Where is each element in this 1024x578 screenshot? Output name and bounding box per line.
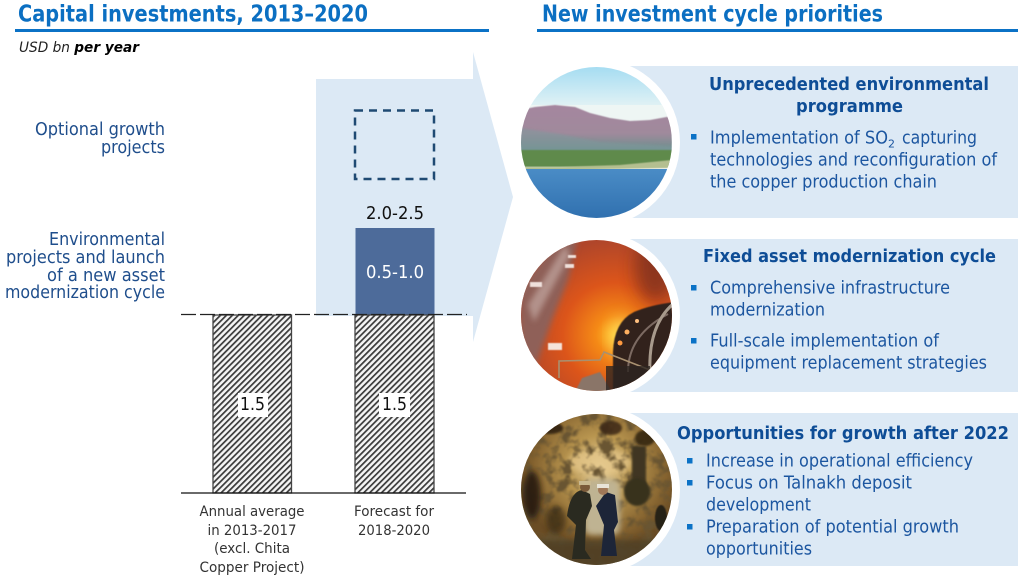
bullet list: Preparation of potential growth [706,518,959,538]
panel: opportunities for growth [513,406,1018,573]
bullet list: equipment replacement strategies [710,354,987,374]
panel: fixed asset modernization [513,232,1018,399]
axis label: annual average: Copper Project) [200,560,304,576]
bar: annual average [213,315,292,493]
dashed box: optional growth [355,110,434,179]
label: environmental projects: projects and launch [6,248,165,268]
photo: lake and mountains [520,66,674,221]
bar: annual average: 1.5 [240,394,265,415]
axis label: annual average: Annual average [200,504,305,520]
bullet list: opportunities [706,540,812,560]
miner left [567,490,592,559]
bullet list: the copper production chain [710,172,937,192]
heading: programme [796,96,903,117]
bullet list: Increase in operational efficiency [706,452,973,472]
label: environmental projects: Environmental [49,230,165,250]
bullet list: Focus on Talnakh deposit [706,474,912,494]
label: optional growth projects [35,120,165,158]
bullet list: development [706,496,811,516]
bullet list: 2 [888,138,895,150]
bullet list [691,128,998,192]
bullet list: Full-scale implementation of [710,332,940,352]
heading [709,74,989,117]
panel: environmental programme [521,66,1018,218]
bullet list: capturing [902,128,977,148]
chart: capital investment bars [181,110,467,576]
label: optional growth projects: Optional growth [35,120,165,140]
axis label: annual average [200,504,305,576]
arrow: background pointing to priorities [316,52,513,342]
photo: underground miners [520,413,674,568]
title: capital investments: Capital investments, 2013–2020 [18,2,368,28]
axis label: forecast: 2018-2020 [358,523,430,539]
heading: Fixed asset modernization cycle [703,246,996,267]
bullet list: modernization [710,300,825,320]
photo: molten metal [520,234,675,394]
axis label: forecast: Forecast for [354,504,434,520]
heading: Unprecedented environmental [709,74,989,95]
bullet list [691,278,987,374]
bar: forecast [355,315,434,493]
label: environmental projects [5,230,165,303]
axis label: annual average: (excl. Chita [214,541,290,557]
miner right [596,492,618,556]
label: environmental projects: of a new asset [47,266,165,286]
bullet list: technologies and reconfiguration of [710,150,998,170]
total label: 2.0-2.5 [366,203,424,224]
bullet list [687,452,973,560]
bar: environmental segment [356,228,434,315]
axis label: forecast [354,504,434,539]
label: optional growth projects: projects [101,138,165,158]
title: new investment cycle priorities: New investment cycle priorities [542,2,883,28]
unit label: USD bn per year [19,40,140,56]
bar: forecast: 1.5 [382,394,407,415]
bullet list: Implementation of SO [710,128,888,148]
label: environmental projects: modernization cycle [5,283,165,303]
bar: environmental segment: 0.5-1.0 [366,262,424,283]
bullet list: Comprehensive infrastructure [710,278,950,298]
axis label: annual average: in 2013-2017 [208,523,296,539]
